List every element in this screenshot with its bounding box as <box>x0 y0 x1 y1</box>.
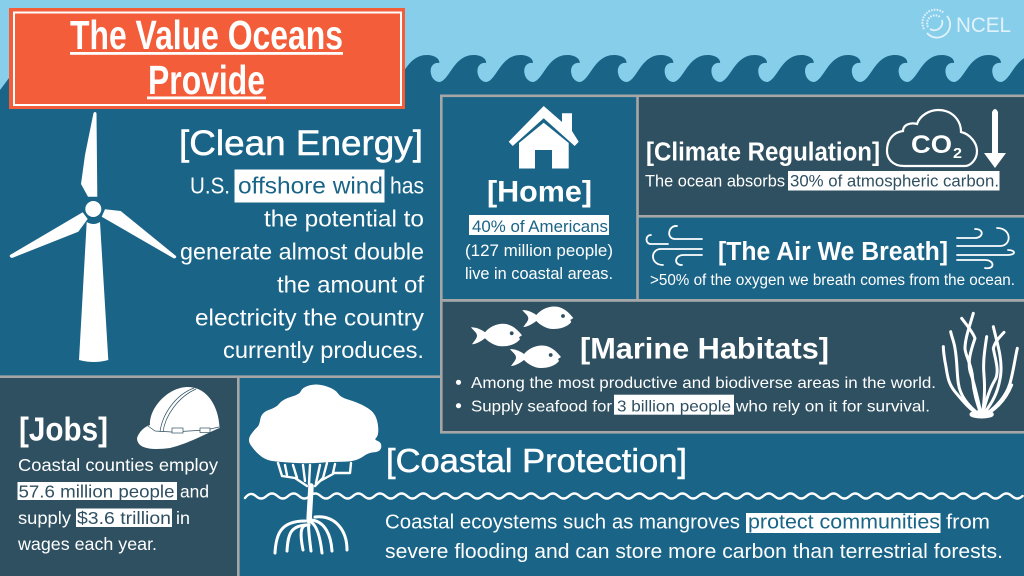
text: marine bullets: Among the most productive and biodiverse areas in the world. <box>471 375 936 392</box>
text: coastal body: severe flooding and can store more carbon than terrestrial forests. <box>385 541 1003 563</box>
text: clean energy body: generate almost double <box>180 238 424 264</box>
logo: NCEL <box>922 10 1011 38</box>
icon: wind left <box>646 226 702 265</box>
text: home body: 40% of Americans <box>472 218 608 236</box>
text: coastal body <box>385 512 1003 563</box>
icon: CO2 cloud <box>887 110 977 166</box>
heading: clean energy: [Clean Energy] <box>179 124 423 163</box>
text: climate body: 30% of atmospheric carbon. <box>790 173 999 191</box>
text: clean energy body: the potential to <box>264 206 424 232</box>
panel: clean energy <box>10 112 425 363</box>
text: marine bullets: 3 billion people <box>617 398 731 415</box>
text: jobs body: Coastal counties employ <box>18 455 218 475</box>
text: climate body: The ocean absorbs <box>645 173 785 191</box>
icon: house <box>509 106 579 168</box>
text: clean energy body: currently produces. <box>223 337 424 363</box>
text: jobs body: in <box>176 508 190 528</box>
water line <box>245 494 1023 498</box>
text: jobs body: and <box>180 481 209 501</box>
text: clean energy body: offshore wind <box>238 173 383 199</box>
heading: home: [Home] <box>487 176 592 209</box>
text: clean energy body: U.S. <box>190 173 230 199</box>
panel: marine habitats <box>442 302 1024 431</box>
heading: marine habitats: [Marine Habitats] <box>580 333 829 366</box>
text: clean energy body <box>180 170 425 363</box>
text: jobs body: $3.6 trillion <box>77 508 171 528</box>
text: home body <box>465 215 613 283</box>
text: clean energy body: has <box>390 173 424 199</box>
icon: CO2 cloud: 2 <box>953 145 962 162</box>
text: clean energy body: the amount of <box>277 271 425 297</box>
text: marine bullets <box>456 375 936 415</box>
text: coastal body: Coastal ecoystems such as mangroves <box>385 512 740 534</box>
text: coastal body: from <box>946 512 990 534</box>
icon: coral <box>943 313 1017 417</box>
logo: NCEL: NCEL <box>956 14 1011 37</box>
icon: mangrove tree <box>250 385 381 553</box>
title banner <box>9 8 405 109</box>
panel: home <box>442 97 637 299</box>
text: marine bullets: who rely on it for survival. <box>735 398 930 415</box>
text: jobs body: wages each year. <box>17 534 157 554</box>
icon: wind right <box>957 228 1014 268</box>
panel: jobs <box>0 378 237 576</box>
panel: climate regulation <box>639 97 1024 215</box>
title banner: Provide <box>148 57 265 103</box>
heading: jobs: [Jobs] <box>19 411 108 448</box>
text: marine bullets: Supply seafood for <box>471 398 613 415</box>
icon: hard hat <box>137 387 220 449</box>
text: climate body <box>645 171 1000 191</box>
text: jobs body: supply <box>18 508 71 528</box>
heading: the air we breath: [The Air We Breath] <box>718 238 948 266</box>
text: jobs body <box>17 455 218 554</box>
icon: CO2 cloud: CO <box>911 131 952 159</box>
heading: coastal protection: [Coastal Protection] <box>386 442 687 479</box>
panel: the air we breathe <box>639 218 1024 299</box>
icon: wind turbine <box>10 112 176 362</box>
icon: fish <box>471 306 573 368</box>
heading: climate regulation: [Climate Regulation] <box>646 139 880 167</box>
title banner: The Value Oceans <box>70 12 343 58</box>
arrow: down <box>984 109 1006 168</box>
text: home body: live in coastal areas. <box>465 265 613 283</box>
panel: coastal protection <box>245 385 1023 563</box>
text: home body: (127 million people) <box>465 242 613 260</box>
text: jobs body: 57.6 million people <box>18 481 174 501</box>
text: coastal body: protect communities <box>748 512 940 534</box>
text: air body: >50% of the oxygen we breath comes from the ocean. <box>650 272 1015 289</box>
text: clean energy body: electricity the country <box>195 304 425 330</box>
